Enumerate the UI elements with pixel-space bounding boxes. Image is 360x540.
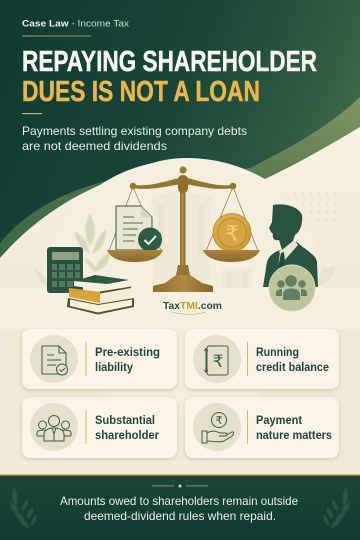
label: shareholder bbox=[95, 429, 159, 442]
divider bbox=[247, 342, 248, 376]
background: olive swoosh band bbox=[0, 97, 360, 270]
coin on right pan bbox=[213, 214, 251, 252]
footer text: Amounts owed to shareholders remain outside bbox=[60, 494, 298, 508]
footer leaves bbox=[10, 488, 350, 528]
icon: document check bbox=[30, 335, 78, 383]
panel: substantial shareholder bbox=[22, 397, 177, 458]
subtitle: are not deemed dividends bbox=[22, 139, 167, 153]
label bbox=[95, 414, 159, 442]
hero arch bbox=[43, 160, 323, 416]
label: credit balance bbox=[256, 361, 330, 374]
document on left pan bbox=[116, 206, 162, 252]
table surface bbox=[0, 288, 360, 329]
footer band bbox=[0, 474, 360, 540]
title: DUES IS NOT A LOAN bbox=[22, 76, 260, 108]
label bbox=[256, 414, 332, 442]
label: Running bbox=[256, 346, 299, 359]
background: cream stage bbox=[0, 127, 360, 480]
green book bbox=[74, 280, 129, 290]
beam bbox=[133, 178, 233, 189]
background: dark green header bbox=[0, 0, 360, 300]
calculator bbox=[47, 247, 83, 293]
panel: payment nature matters bbox=[185, 397, 339, 458]
post bbox=[180, 190, 186, 268]
coin on right pan: ₹ bbox=[225, 222, 239, 246]
panel: pre-existing liability bbox=[22, 329, 177, 389]
label: Substantial bbox=[95, 414, 155, 427]
label: nature matters bbox=[256, 429, 332, 442]
icon: hand with rupee bbox=[193, 403, 241, 451]
divider bbox=[86, 342, 87, 376]
background leaves left bbox=[34, 213, 336, 288]
bottom book bbox=[67, 298, 134, 314]
label bbox=[256, 346, 330, 374]
gold book bbox=[69, 288, 100, 303]
footer text bbox=[60, 494, 298, 523]
label: Payment bbox=[256, 414, 302, 427]
label bbox=[95, 346, 160, 374]
footer ornament bbox=[152, 484, 208, 488]
icon: ledger rupee: ₹ bbox=[213, 352, 223, 372]
label: liability bbox=[95, 361, 134, 374]
group badge bbox=[269, 265, 315, 311]
icon: shareholders bbox=[30, 403, 78, 451]
logo: TaxTMI.com: TaxTMI.com bbox=[163, 300, 222, 312]
pans bbox=[107, 250, 163, 262]
icon: hand with rupee: ₹ bbox=[216, 414, 222, 427]
divider bbox=[247, 410, 248, 444]
divider bbox=[86, 410, 87, 444]
panel: running credit balance bbox=[185, 329, 339, 389]
title bbox=[22, 46, 317, 108]
person silhouette bbox=[263, 204, 318, 287]
footer text: deemed-dividend rules when repaid. bbox=[84, 509, 276, 523]
kicker rule bbox=[22, 36, 91, 37]
subtitle: Payments settling existing company debts bbox=[22, 124, 247, 138]
scale strings bbox=[109, 187, 258, 251]
title rule bbox=[22, 113, 42, 114]
label: Pre-existing bbox=[95, 346, 160, 359]
books bbox=[67, 275, 134, 314]
background building bbox=[150, 190, 252, 288]
subtitle bbox=[22, 124, 247, 153]
kicker: Case Law - Income Tax bbox=[22, 18, 129, 30]
dot pattern bbox=[294, 193, 336, 221]
scale bbox=[107, 166, 260, 292]
icon: ledger rupee bbox=[193, 335, 241, 383]
